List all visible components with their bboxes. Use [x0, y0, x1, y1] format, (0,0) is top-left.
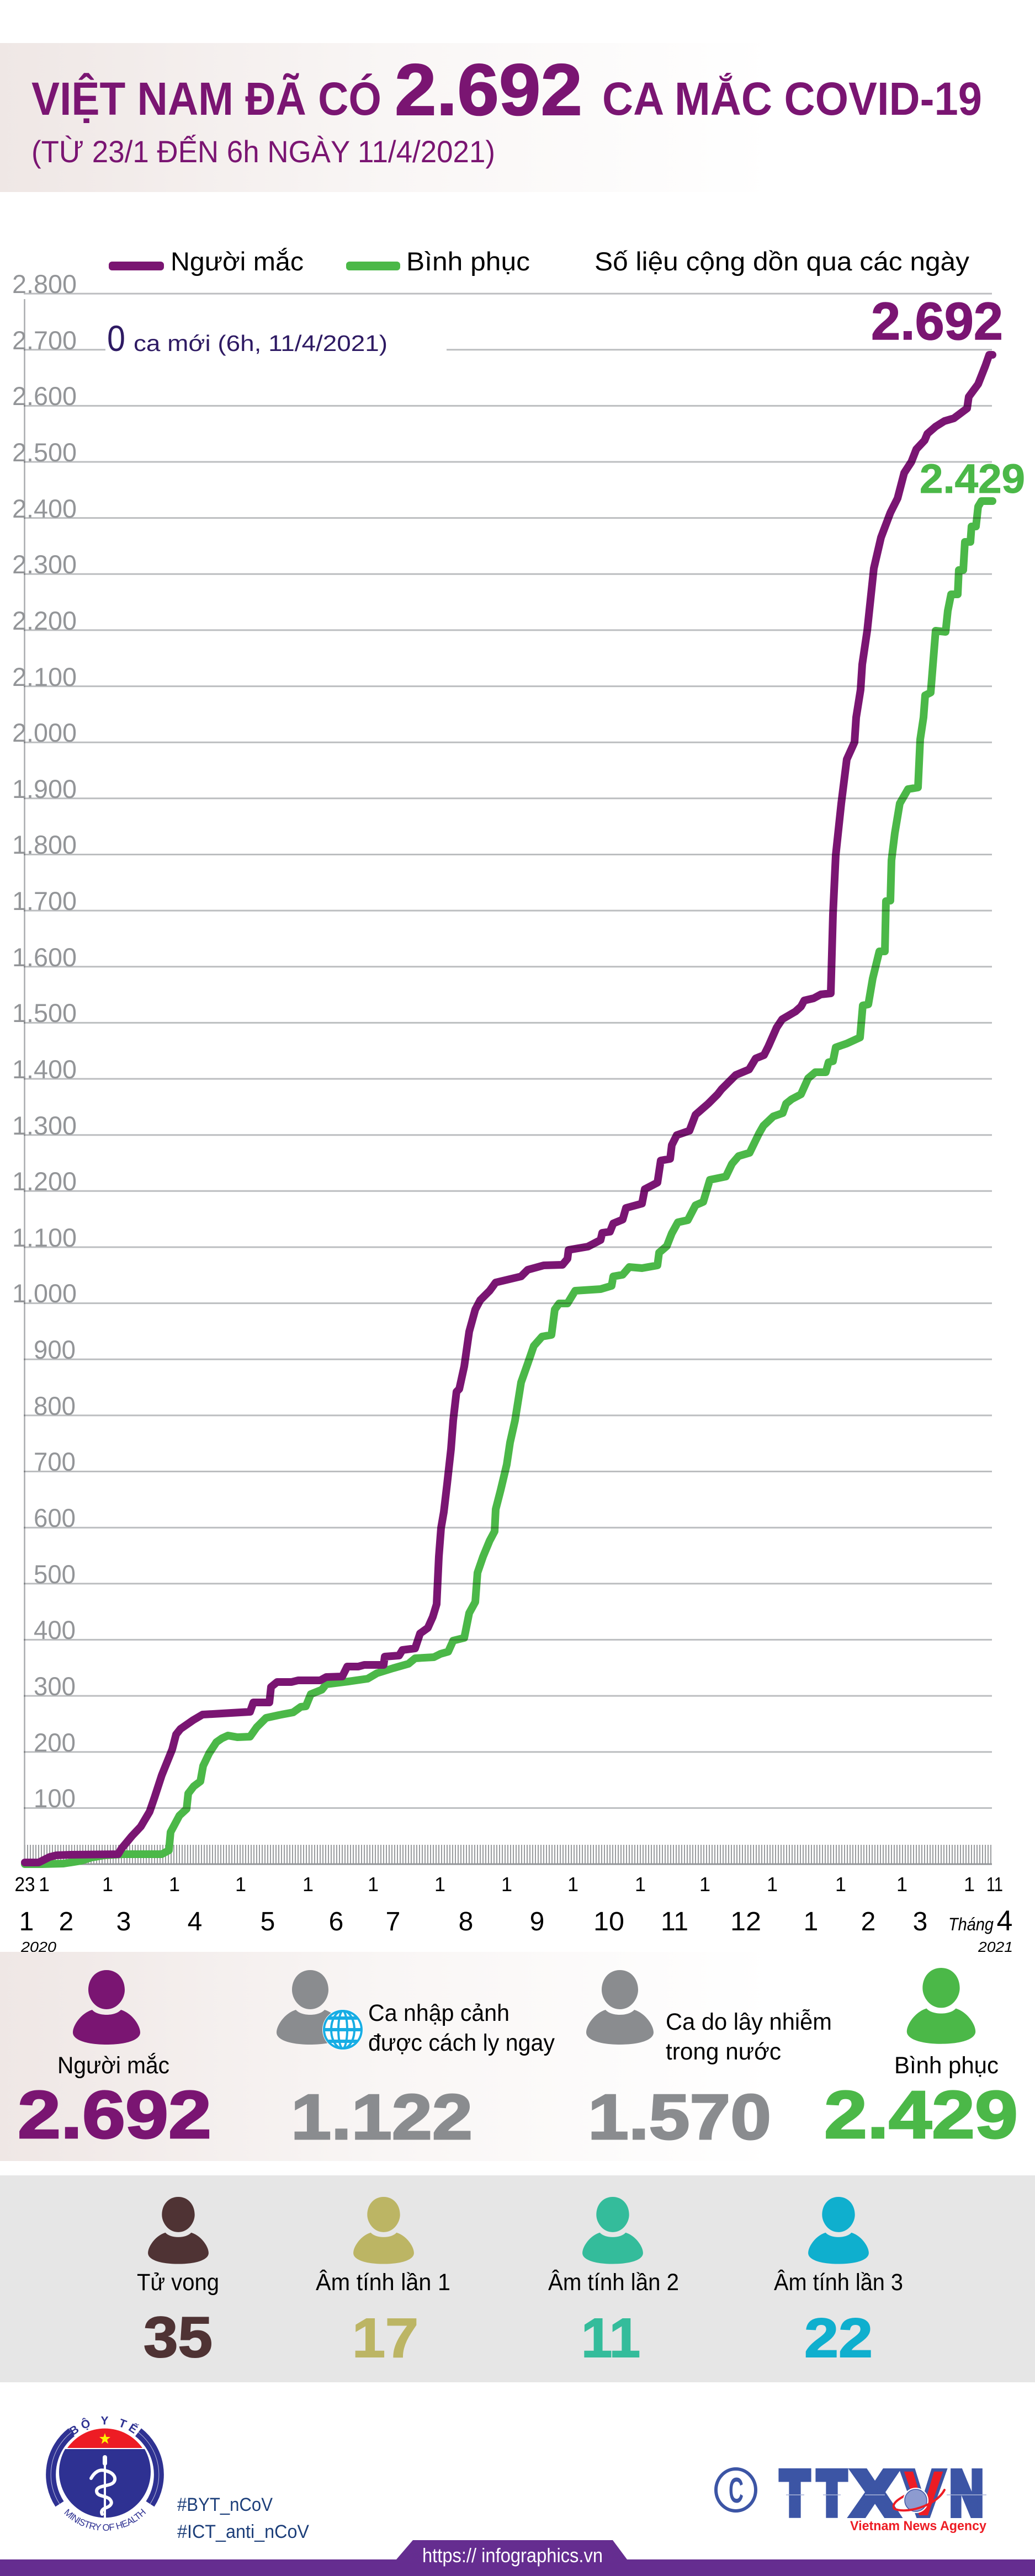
day ticks labels: 1	[368, 1873, 379, 1896]
title: VIỆT NAM ĐÃ CÓ	[31, 73, 381, 125]
y axis labels: 200	[34, 1728, 76, 1757]
day ticks labels: 1	[39, 1873, 50, 1896]
day ticks labels: 1	[767, 1873, 778, 1896]
year and month captions	[20, 1914, 1013, 1955]
line chart	[12, 269, 1025, 1955]
footer bar	[0, 2540, 1035, 2576]
y axis labels: 500	[34, 1560, 76, 1589]
label: domestic cases: trong nước	[666, 2039, 781, 2065]
month labels: 8	[459, 1907, 473, 1936]
y axis labels: 1.000	[12, 1279, 77, 1308]
logo: TTXVN: T	[818, 2458, 846, 2528]
new cases note: 0	[107, 318, 125, 359]
new cases note: ca mới (6h, 11/4/2021)	[134, 331, 388, 356]
label: imported cases: được cách ly ngay	[368, 2030, 555, 2056]
label: recovered: Bình phục	[894, 2052, 999, 2079]
day ticks labels: 11	[986, 1873, 1003, 1896]
title: CA MẮC COVID-19	[602, 73, 982, 125]
y axis labels	[12, 269, 77, 1813]
title band	[0, 43, 982, 192]
day ticks labels: 1	[699, 1873, 710, 1896]
y axis labels: 2.500	[12, 438, 77, 467]
logo: TTXVN: V	[904, 2458, 943, 2529]
logo: TTXVN: Vietnam News Agency	[850, 2519, 987, 2534]
chart legend: Người mắc	[171, 247, 304, 276]
month labels: 2	[59, 1907, 73, 1936]
panel: secondary totals	[0, 2175, 1035, 2382]
day ticks labels: 1	[964, 1873, 975, 1896]
y axis labels: 1.900	[12, 774, 77, 803]
number: recovered: 2.429	[824, 2077, 1018, 2152]
label: negative twice: Âm tính lần 2	[548, 2269, 679, 2296]
icon: negative once person	[353, 2197, 414, 2264]
logo: ministry of health: MINISTRY OF HEALTH	[64, 2509, 146, 2531]
number: imported cases: 1.122	[291, 2081, 473, 2153]
label: negative once: Âm tính lần 1	[316, 2269, 450, 2296]
end label recovered: 2.429	[920, 456, 1025, 502]
icon: confirmed person	[73, 1970, 140, 2045]
day ticks labels: 1	[635, 1873, 646, 1896]
icon: negative three times person	[808, 2197, 869, 2264]
number: negative once: 17	[352, 2307, 418, 2369]
label: domestic cases	[666, 2009, 832, 2065]
y axis labels: 2.700	[12, 326, 77, 355]
icon: domestic case person	[586, 1970, 654, 2045]
icon: imported case person with globe	[277, 1970, 363, 2050]
number: confirmed: 2.692	[18, 2077, 211, 2152]
y axis labels: 2.200	[12, 606, 77, 635]
logo: copyright symbol: C	[729, 2470, 744, 2510]
hashtags: #ICT_anti_nCoV	[177, 2521, 309, 2542]
day ticks labels: 1	[235, 1873, 246, 1896]
day ticks labels: 1	[567, 1873, 578, 1896]
y axis labels: 1.700	[12, 886, 77, 916]
day ticks labels: 1	[302, 1873, 314, 1896]
year and month captions: 2020	[20, 1939, 57, 1955]
title	[31, 49, 982, 130]
hashtags	[177, 2494, 309, 2542]
day ticks labels	[14, 1873, 1003, 1896]
y axis labels: 2.400	[12, 494, 77, 523]
month labels: 11	[661, 1907, 688, 1936]
y axis labels: 1.200	[12, 1167, 77, 1196]
label: imported cases: Ca nhập cảnh	[368, 2000, 509, 2026]
end label confirmed: 2.692	[871, 292, 1003, 351]
label: confirmed: Người mắc	[57, 2052, 169, 2079]
label: imported cases	[368, 2000, 555, 2056]
year and month captions: 2021	[978, 1939, 1013, 1955]
month labels: 1	[19, 1907, 34, 1936]
y axis labels: 600	[34, 1503, 76, 1532]
month labels: 10	[593, 1907, 624, 1936]
y axis labels: 2.800	[12, 269, 77, 299]
y axis labels: 1.600	[12, 943, 77, 972]
logo: TTXVN	[781, 2458, 987, 2534]
y axis labels: 100	[34, 1784, 76, 1813]
chart legend	[109, 247, 970, 276]
chart legend: Số liệu cộng dồn qua các ngày	[595, 247, 970, 276]
logo: TTXVN: V	[903, 2458, 943, 2528]
day ticks labels: 1	[501, 1873, 512, 1896]
label: domestic cases: Ca do lây nhiễm	[666, 2009, 832, 2035]
month labels: 4	[188, 1907, 202, 1936]
logo: copyright symbol	[716, 2469, 756, 2511]
y axis labels: 700	[34, 1447, 76, 1476]
label: negative three times: Âm tính lần 3	[774, 2269, 903, 2296]
number: negative twice: 11	[581, 2307, 640, 2369]
new cases note	[107, 318, 388, 359]
recovered curve	[25, 501, 992, 1864]
month labels	[19, 1905, 1012, 1937]
day ticks labels: 1	[434, 1873, 445, 1896]
y axis labels: 800	[34, 1391, 76, 1420]
logo: TTXVN: N	[950, 2458, 983, 2528]
panel: main totals	[0, 1952, 1018, 2161]
y axis labels: 2.300	[12, 550, 77, 579]
footer bar: https:// infographics.vn	[422, 2544, 603, 2567]
y axis labels: 300	[34, 1672, 76, 1701]
y axis labels: 2.000	[12, 718, 77, 747]
label: deaths: Tử vong	[137, 2269, 219, 2296]
month labels: 12	[730, 1907, 761, 1936]
y axis labels: 1.100	[12, 1223, 77, 1252]
number: domestic cases: 1.570	[588, 2081, 771, 2153]
icon: deaths person	[148, 2197, 209, 2264]
month labels: 9	[530, 1907, 544, 1936]
subtitle: (TỪ 23/1 ĐẾN 6h NGÀY 11/4/2021)	[31, 134, 495, 169]
y axis labels: 2.600	[12, 381, 77, 411]
hashtags: #BYT_nCoV	[177, 2494, 273, 2515]
icon: negative twice person	[582, 2197, 643, 2264]
logo: ministry of health	[46, 2416, 164, 2531]
y axis labels: 1.400	[12, 1055, 77, 1084]
month labels: 6	[329, 1907, 343, 1936]
y axis labels: 400	[34, 1615, 76, 1644]
logo: ministry of health: BỘ Y TẾ	[69, 2416, 139, 2435]
day ticks labels: 1	[102, 1873, 113, 1896]
month labels: 4	[997, 1905, 1012, 1937]
month labels: 5	[261, 1907, 275, 1936]
icon: recovered person	[907, 1968, 975, 2044]
month labels: 2	[861, 1907, 875, 1936]
logo: TTXVN: T	[781, 2458, 809, 2528]
day ticks labels: 1	[835, 1873, 846, 1896]
number: deaths: 35	[144, 2306, 213, 2370]
month labels: 1	[804, 1907, 818, 1936]
month labels: 3	[913, 1907, 927, 1936]
number: negative three times: 22	[804, 2307, 873, 2369]
day ticks labels: 1	[896, 1873, 907, 1896]
month labels: 3	[116, 1907, 131, 1936]
day ticks labels: 1	[169, 1873, 180, 1896]
y axis labels: 900	[34, 1335, 76, 1364]
month labels: 7	[386, 1907, 400, 1936]
y axis labels: 2.100	[12, 662, 77, 691]
chart legend: Bình phục	[406, 247, 530, 276]
y axis labels: 1.500	[12, 998, 77, 1028]
day ticks labels: 23	[14, 1873, 35, 1896]
y axis labels: 1.800	[12, 830, 77, 859]
confirmed curve	[25, 355, 992, 1862]
logo: TTXVN: X	[853, 2458, 897, 2528]
year and month captions: Tháng	[948, 1914, 994, 1934]
y axis labels: 1.300	[12, 1111, 77, 1140]
title: 2.692	[395, 49, 582, 130]
